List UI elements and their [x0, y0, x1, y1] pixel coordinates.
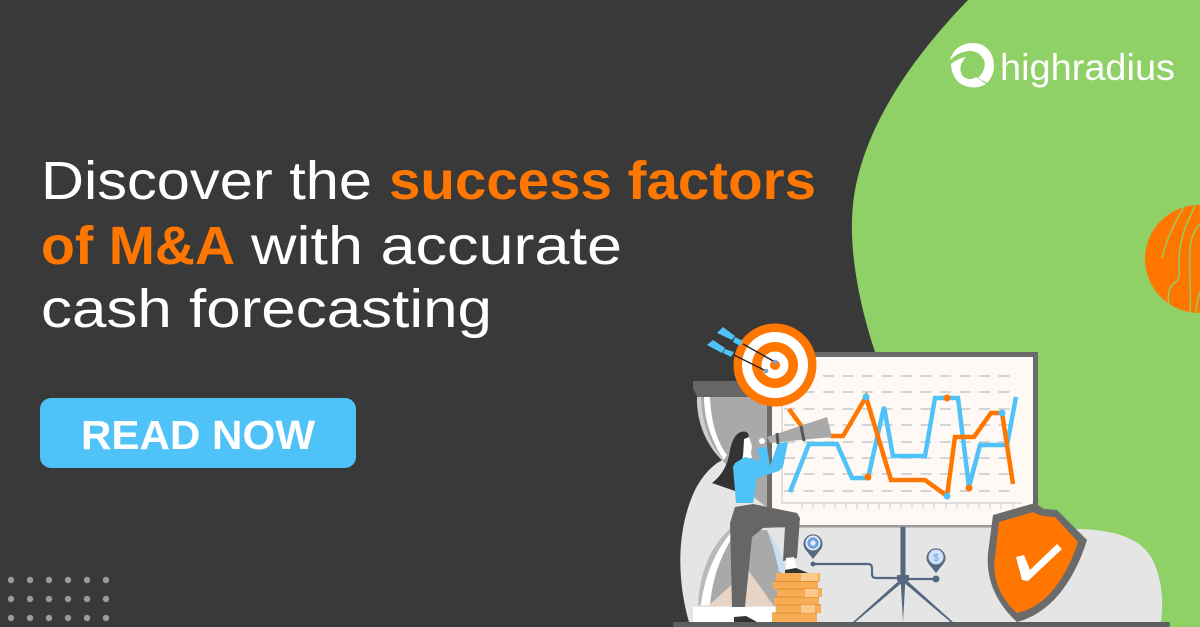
icon: target with arrows — [707, 324, 816, 406]
face — [743, 437, 752, 458]
blue line series — [790, 397, 1016, 492]
icon: dollar pin: $ — [933, 553, 939, 564]
headline: cash forecasting — [41, 279, 492, 339]
read now button — [40, 398, 356, 468]
green background shape — [852, 0, 1200, 627]
orange line series — [789, 397, 1013, 496]
shoes — [734, 557, 797, 617]
headline: success factors — [389, 151, 816, 211]
presentation board — [767, 352, 1038, 528]
read now button: READ NOW — [81, 412, 315, 458]
logo mark — [950, 43, 994, 87]
headline: with accurate — [250, 216, 622, 276]
logo wordmark: highradius — [1000, 47, 1175, 88]
icon: gear pin — [804, 534, 903, 578]
board stand — [853, 527, 953, 622]
headline — [41, 151, 816, 339]
logo: highradius — [950, 43, 1175, 88]
arrows — [707, 327, 777, 373]
data points — [862, 394, 1006, 500]
grey backdrop blob — [680, 440, 1162, 622]
trousers — [730, 504, 800, 607]
hair — [712, 432, 749, 491]
dot grid — [8, 577, 109, 621]
woman with telescope — [712, 417, 832, 622]
telescope — [759, 417, 832, 444]
base line — [673, 622, 1170, 627]
hourglass — [693, 381, 786, 622]
headline: Discover the — [41, 151, 372, 211]
coin stack — [772, 573, 822, 622]
shirt — [733, 442, 788, 503]
icon: shield with check — [988, 503, 1087, 622]
icon: dollar pin — [903, 548, 946, 582]
grid lines — [784, 376, 1015, 491]
headline: of M&A — [41, 216, 235, 276]
orange decorative circle — [1145, 205, 1200, 313]
